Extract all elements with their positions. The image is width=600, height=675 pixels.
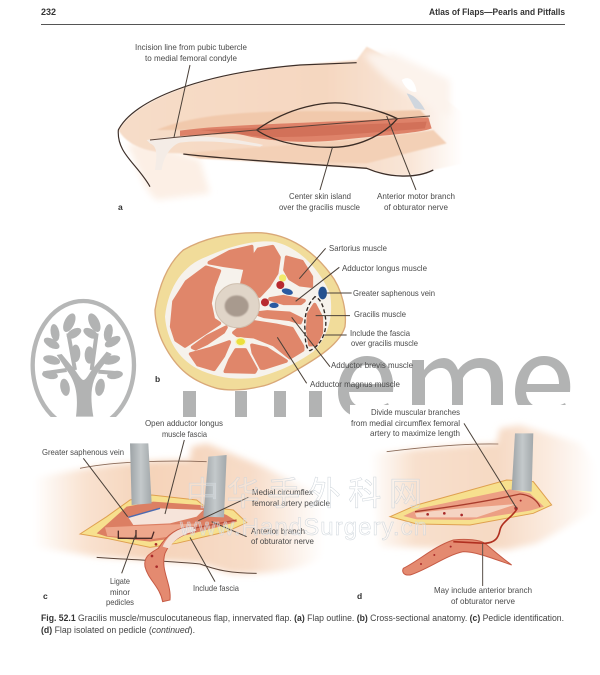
panel letter a: a <box>118 202 123 212</box>
watermark word Thieme <box>183 356 570 418</box>
panel c: pedicle identification <box>33 418 330 607</box>
flap sutures <box>151 543 158 568</box>
pointer: circumflex <box>198 497 248 521</box>
retractor left <box>130 443 152 505</box>
label: divide muscular branches: artery to maximize length <box>370 428 460 438</box>
saphenous vein <box>128 508 160 517</box>
pointer: open fascia <box>165 440 184 514</box>
short head biceps <box>193 327 226 349</box>
label: may include anterior branch: of obturator nerve <box>451 596 515 606</box>
panel d: flap isolated <box>351 407 597 606</box>
knee tendon highlights <box>147 136 263 170</box>
pointer: minor pedicles <box>122 534 136 573</box>
dark upper wound edge <box>415 494 540 512</box>
label: open adductor longus <box>145 418 223 439</box>
pedicle <box>453 508 517 543</box>
white groin patch <box>402 78 417 92</box>
incision yellow margin <box>80 495 247 547</box>
thigh upper outline <box>80 461 207 468</box>
header rule <box>41 24 565 25</box>
caption line 1: Fig. 52.1 Gracilis muscle/musculocutaneous flap, innervated flap. (a) Flap outline. (b) Cross-sectional anatomy. (c) Pedicle identification. <box>41 613 564 623</box>
label: center skin island: over the gracilis muscle <box>279 202 360 212</box>
pointer: saphenous <box>83 458 128 517</box>
pointer: motor branch <box>387 116 416 190</box>
dashed fascia line <box>305 297 326 351</box>
pointer: skin island <box>320 147 333 190</box>
femur <box>215 284 259 328</box>
sartorius <box>285 257 311 286</box>
label: may include anterior branch: May include anterior branch <box>434 585 532 595</box>
watermark tree emblem <box>33 301 134 429</box>
running title: Atlas of Flaps—Pearls and Pitfalls <box>429 7 565 17</box>
incision yellow margin <box>390 480 552 525</box>
panel c illustration <box>33 440 323 602</box>
figure caption <box>41 613 564 635</box>
label: divide muscular branches: from medial circumflex femoral <box>351 418 460 428</box>
label: open adductor longus: muscle fascia <box>162 429 207 439</box>
panel d illustration <box>370 423 597 586</box>
caption line 2: (d) Flap isolated on pedicle (continued). <box>41 625 195 635</box>
label: gracilis: Gracilis muscle <box>354 309 406 319</box>
label: ligate minor pedicles: minor <box>110 587 130 597</box>
label: include fascia <box>350 328 418 348</box>
vessels femoral <box>279 274 286 282</box>
label: anterior motor branch: Anterior motor branch <box>377 191 455 201</box>
exposed fascia <box>128 508 203 525</box>
label: center skin island <box>279 191 360 212</box>
pointer: adductor magnus <box>277 337 307 383</box>
incision line <box>150 116 430 140</box>
label: incision line: Incision line from pubic tubercle <box>135 42 247 52</box>
label: greater saphenous vein c: Greater saphenous vein <box>42 447 124 457</box>
thigh upper outline <box>387 444 498 452</box>
label: incision line <box>135 42 247 63</box>
gracilis muscle <box>180 117 432 142</box>
page number: 232 <box>41 7 56 17</box>
label: adductor magnus: Adductor magnus muscle <box>310 379 400 389</box>
lower leg skin fade <box>127 143 210 200</box>
sciatic nerve <box>236 338 246 346</box>
vastus lateralis <box>172 267 219 346</box>
greater saphenous vein <box>318 287 327 299</box>
panel a: thigh flap outline <box>118 42 463 212</box>
inner fascia white <box>165 241 331 379</box>
panel letter d: d <box>357 591 362 601</box>
flap skin island outline <box>257 103 397 147</box>
adductor longus <box>270 297 304 303</box>
watermark: Chinese site name: 中华手外科网 <box>186 475 422 512</box>
label: open adductor longus: Open adductor longus <box>145 418 223 428</box>
panel letter c: c <box>43 591 48 601</box>
thigh skin <box>33 443 323 574</box>
semitendinosus <box>225 350 256 372</box>
pointer: gracilis <box>316 314 350 317</box>
label: medial circumflex <box>252 487 330 508</box>
biceps femoris <box>191 342 229 369</box>
pale wound floor <box>415 504 517 517</box>
label: divide muscular branches <box>351 407 460 438</box>
label: ligate minor pedicles <box>106 576 134 607</box>
thigh skin <box>370 425 597 550</box>
skin folds <box>157 110 430 130</box>
adductor magnus <box>234 322 303 358</box>
rectus femoris <box>209 247 252 268</box>
label: include fascia: over gracilis muscle <box>351 338 418 348</box>
label: ligate minor pedicles: pedicles <box>106 597 134 607</box>
label: greater saphenous vein: Greater saphenous vein <box>353 288 435 298</box>
label: center skin island: Center skin island <box>289 191 351 201</box>
label: divide muscular branches: Divide muscular branches <box>371 407 460 417</box>
pointer: adductor longus <box>296 267 339 301</box>
label: anterior motor branch <box>377 191 455 212</box>
pointer: sartorius <box>299 248 326 279</box>
label: anterior branch: of obturator nerve <box>251 536 314 546</box>
panel b: cross-section <box>155 233 435 390</box>
label: incision line: to medial femoral condyle <box>145 53 237 63</box>
pointer: adductor brevis <box>292 317 330 367</box>
label: sartorius: Sartorius muscle <box>329 243 387 253</box>
label: adductor brevis: Adductor brevis muscle <box>331 360 413 370</box>
pointer: anterior branch <box>481 543 484 586</box>
retractor right <box>203 455 227 517</box>
label: include fascia: Include the fascia <box>350 328 410 338</box>
label: medial circumflex: femoral artery pedicle <box>252 498 330 508</box>
vastus medialis <box>242 247 279 296</box>
gracilis <box>308 305 321 345</box>
semimembranosus <box>252 345 286 368</box>
groin shading <box>363 53 450 117</box>
pedicle vessel <box>193 520 237 528</box>
label: ligate minor pedicles: Ligate <box>110 576 130 586</box>
label: anterior motor branch: of obturator nerve <box>384 202 448 212</box>
wound bed <box>97 502 237 542</box>
pointer: saphenous <box>327 291 352 294</box>
fascia over flap <box>163 527 197 549</box>
cross-section illustration <box>155 233 352 390</box>
watermark: Thieme logo <box>0 301 600 675</box>
isolated flap <box>403 539 512 575</box>
pointer: divide branches <box>464 423 517 508</box>
panel letter b: b <box>155 374 160 384</box>
label: anterior branch <box>251 526 314 546</box>
white mask below watermark <box>0 405 600 675</box>
label: adductor longus: Adductor longus muscle <box>342 263 427 273</box>
label: may include anterior branch <box>434 585 532 606</box>
label: medial circumflex: Medial circumflex <box>252 487 314 497</box>
lower wound layer <box>105 523 200 539</box>
thigh outline <box>118 63 357 187</box>
panel a illustration <box>118 47 463 200</box>
label: include fascia: Include fascia <box>193 583 239 593</box>
retractor <box>512 433 533 492</box>
outer skin ring <box>155 233 345 390</box>
pointer: include fascia <box>190 537 215 582</box>
adductor brevis <box>255 312 301 323</box>
muscles <box>172 247 321 372</box>
pointer: fascia <box>324 333 347 336</box>
label: anterior branch: Anterior branch <box>251 526 305 536</box>
watermark: site URL: www.HandSurgery.cn <box>179 514 427 541</box>
flap muscle <box>145 527 197 602</box>
flap sutures <box>420 500 522 565</box>
running header <box>41 7 565 25</box>
pointer: anterior branch <box>212 522 247 537</box>
pointer: incision line <box>174 65 190 137</box>
ligated minor pedicles <box>118 530 154 538</box>
thigh skin <box>118 47 463 175</box>
thigh lower outline <box>97 557 257 573</box>
wound bed <box>403 489 544 520</box>
